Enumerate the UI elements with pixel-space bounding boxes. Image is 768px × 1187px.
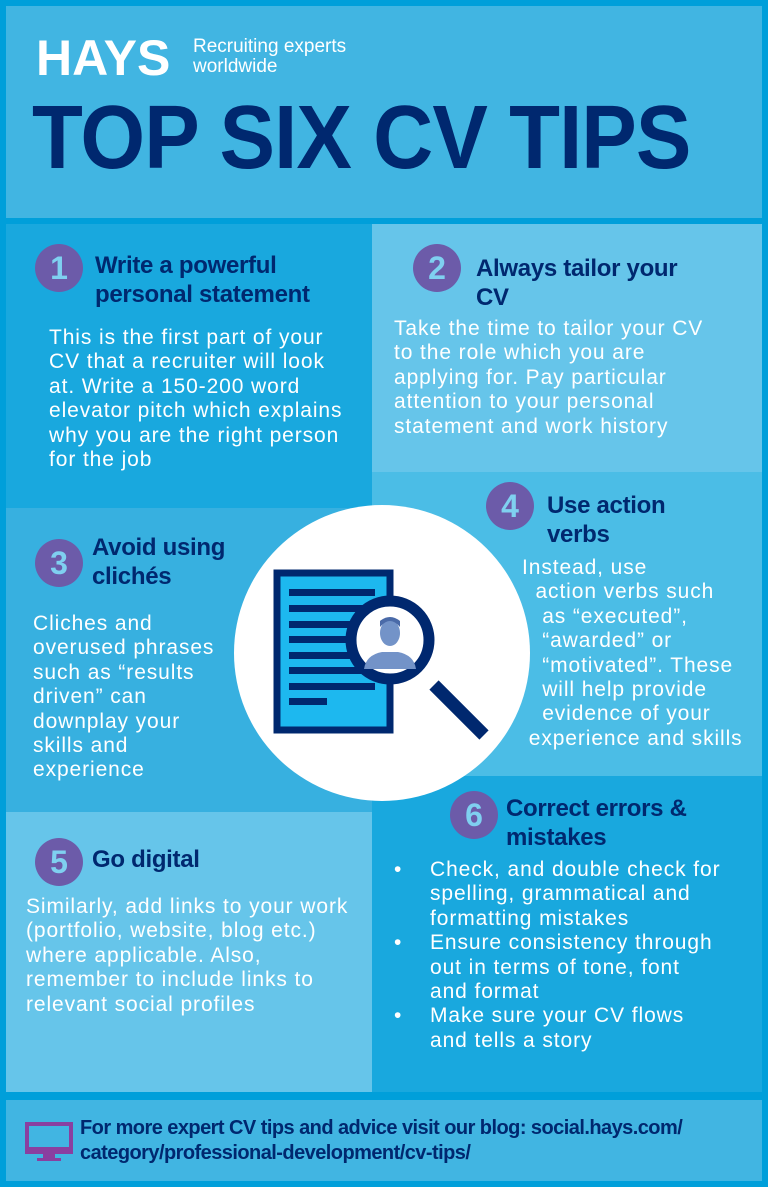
panel 5: remember to include links to	[26, 968, 314, 991]
panel 5: Go digital	[92, 846, 200, 873]
title: TOP SIX CV TIPS	[32, 88, 691, 188]
panel 3: Avoid using	[92, 534, 225, 561]
panel 5	[6, 812, 372, 1092]
panel 1: 1	[50, 250, 68, 286]
panel 1: why you are the right person	[49, 424, 339, 447]
panel 1: CV that a recruiter will look	[49, 350, 325, 373]
panel 1: elevator pitch which explains	[49, 399, 342, 422]
panel 2: CV	[476, 284, 509, 311]
panel 5: where applicable. Also,	[26, 944, 262, 967]
icon: CV magnifier	[234, 505, 530, 801]
panel 3: clichés	[92, 563, 171, 590]
panel 5: relevant social profiles	[26, 993, 255, 1016]
panel 6: and tells a story	[430, 1029, 592, 1052]
panel 1: at. Write a 150-200 word	[49, 375, 300, 398]
panel 3: skills and	[33, 734, 128, 757]
footer text	[80, 1117, 683, 1164]
panel 2: applying for. Pay particular	[394, 366, 667, 389]
header panel	[6, 6, 762, 218]
footer text: For more expert CV tips and advice visit our blog: social.hays.com/	[80, 1117, 682, 1139]
panel 6: Check, and double check for	[430, 858, 720, 881]
panel 4: “awarded” or	[542, 629, 672, 652]
panel 4: verbs	[547, 521, 610, 548]
panel 6: Correct errors &	[506, 795, 687, 822]
panel 4: action verbs such	[535, 580, 714, 603]
panel 2: statement and work history	[394, 415, 668, 438]
icon: monitor	[25, 1122, 73, 1161]
panel 1	[6, 224, 372, 508]
panel 4: Instead, use	[522, 556, 647, 579]
footer text: category/professional-development/cv-tips/	[80, 1142, 470, 1164]
panel 3: overused phrases	[33, 636, 214, 659]
panel 6: mistakes	[506, 824, 606, 851]
panel 6: 6	[465, 797, 483, 833]
panel 2	[372, 224, 762, 472]
panel 2: to the role which you are	[394, 341, 645, 364]
panel 3	[6, 508, 372, 812]
footer	[6, 1100, 762, 1181]
panel 3: 3	[50, 545, 68, 581]
panel 2: attention to your personal	[394, 390, 654, 413]
panel 5: 5	[50, 844, 68, 880]
panel 2: 2	[428, 250, 446, 286]
panel 4: experience and skills	[529, 727, 743, 750]
panel 3: such as “results	[33, 661, 194, 684]
logo: Recruiting experts	[193, 36, 346, 57]
panel 5: Similarly, add links to your work	[26, 895, 348, 918]
logo	[36, 30, 346, 86]
panel 4: evidence of your	[542, 702, 711, 725]
panel 6: formatting mistakes	[430, 907, 629, 930]
panel 1: personal statement	[95, 281, 310, 308]
panel 6: Make sure your CV flows	[430, 1004, 684, 1027]
panel 4: 4	[501, 488, 519, 524]
panel 4	[372, 472, 762, 776]
panel 6: spelling, grammatical and	[430, 882, 691, 905]
panel 4: will help provide	[542, 678, 707, 701]
panel 3: downplay your	[33, 710, 180, 733]
panel 6: Ensure consistency through	[430, 931, 713, 954]
panel 6	[372, 776, 762, 1092]
panel 3: experience	[33, 758, 145, 781]
logo: HAYS	[36, 30, 170, 86]
panel 2: Always tailor your	[476, 255, 677, 282]
panel 4: as “executed”,	[542, 605, 688, 628]
panel 4: Use action	[547, 492, 665, 519]
logo: worldwide	[193, 56, 277, 77]
panel 1: for the job	[49, 448, 152, 471]
panel 6: out in terms of tone, font	[430, 956, 680, 979]
panel 1: Write a powerful	[95, 252, 276, 279]
panel 6: and format	[430, 980, 539, 1003]
panel 3: Cliches and	[33, 612, 153, 635]
panel 3: driven” can	[33, 685, 147, 708]
panel 5: (portfolio, website, blog etc.)	[26, 919, 317, 942]
panel 1: This is the first part of your	[49, 326, 323, 349]
panel 4: “motivated”. These	[542, 654, 733, 677]
panel 2: Take the time to tailor your CV	[394, 317, 703, 340]
